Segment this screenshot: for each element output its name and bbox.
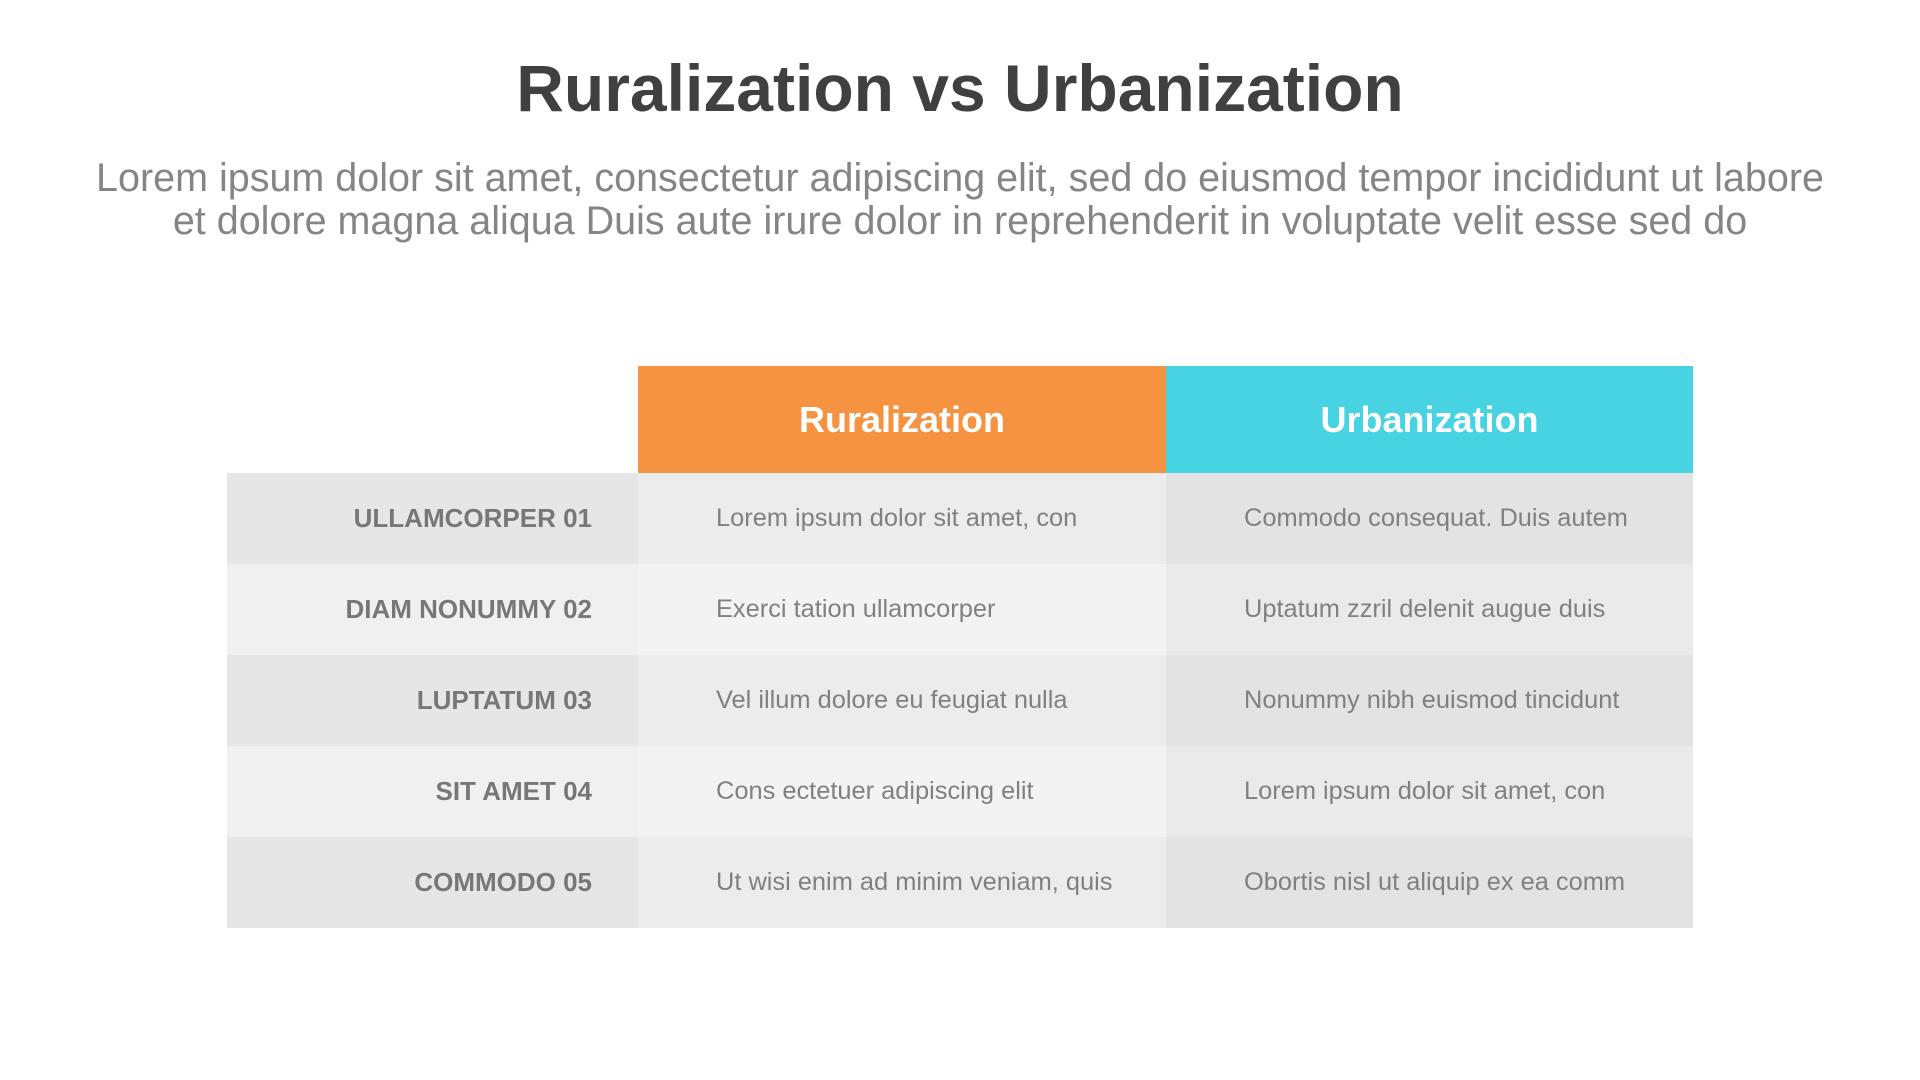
- row 5: [227, 837, 1693, 928]
- subtitle: [96, 156, 1824, 243]
- row 5: COMMODO 05: [414, 867, 592, 897]
- row 3: Nonummy nibh euismod tincidunt: [1244, 686, 1619, 714]
- row 2: DIAM NONUMMY 02: [345, 594, 592, 624]
- row 4: Cons ectetuer adipiscing elit: [716, 777, 1034, 805]
- row 1: [227, 473, 1693, 564]
- row 3: LUPTATUM 03: [417, 685, 592, 715]
- row 1: Lorem ipsum dolor sit amet, con: [716, 504, 1077, 532]
- subtitle: Lorem ipsum dolor sit amet, consectetur adipiscing elit, sed do eiusmod tempor incididunt ut labore: [96, 156, 1824, 200]
- row 1: ULLAMCORPER 01: [354, 503, 592, 533]
- row 2: [227, 564, 1693, 655]
- row 3: [227, 655, 1693, 746]
- header: ruralization: Ruralization: [799, 398, 1005, 440]
- row 4: SIT AMET 04: [435, 776, 592, 806]
- row 4: [227, 746, 1693, 837]
- row 5: Obortis nisl ut aliquip ex ea comm: [1244, 868, 1625, 896]
- row 2: Uptatum zzril delenit augue duis: [1244, 595, 1605, 623]
- row 3: Vel illum dolore eu feugiat nulla: [716, 686, 1067, 714]
- row 1: Commodo consequat. Duis autem: [1244, 504, 1628, 532]
- row 2: Exerci tation ullamcorper: [716, 595, 995, 623]
- header: ruralization: [638, 366, 1166, 473]
- header: urbanization: [1166, 366, 1693, 473]
- row 5: Ut wisi enim ad minim veniam, quis: [716, 868, 1112, 896]
- row 4: Lorem ipsum dolor sit amet, con: [1244, 777, 1605, 805]
- comparison table: [227, 366, 1693, 928]
- title: Ruralization vs Urbanization: [516, 51, 1404, 125]
- header: urbanization: Urbanization: [1320, 398, 1538, 440]
- subtitle: et dolore magna aliqua Duis aute irure dolor in reprehenderit in voluptate velit esse sed do: [173, 199, 1747, 243]
